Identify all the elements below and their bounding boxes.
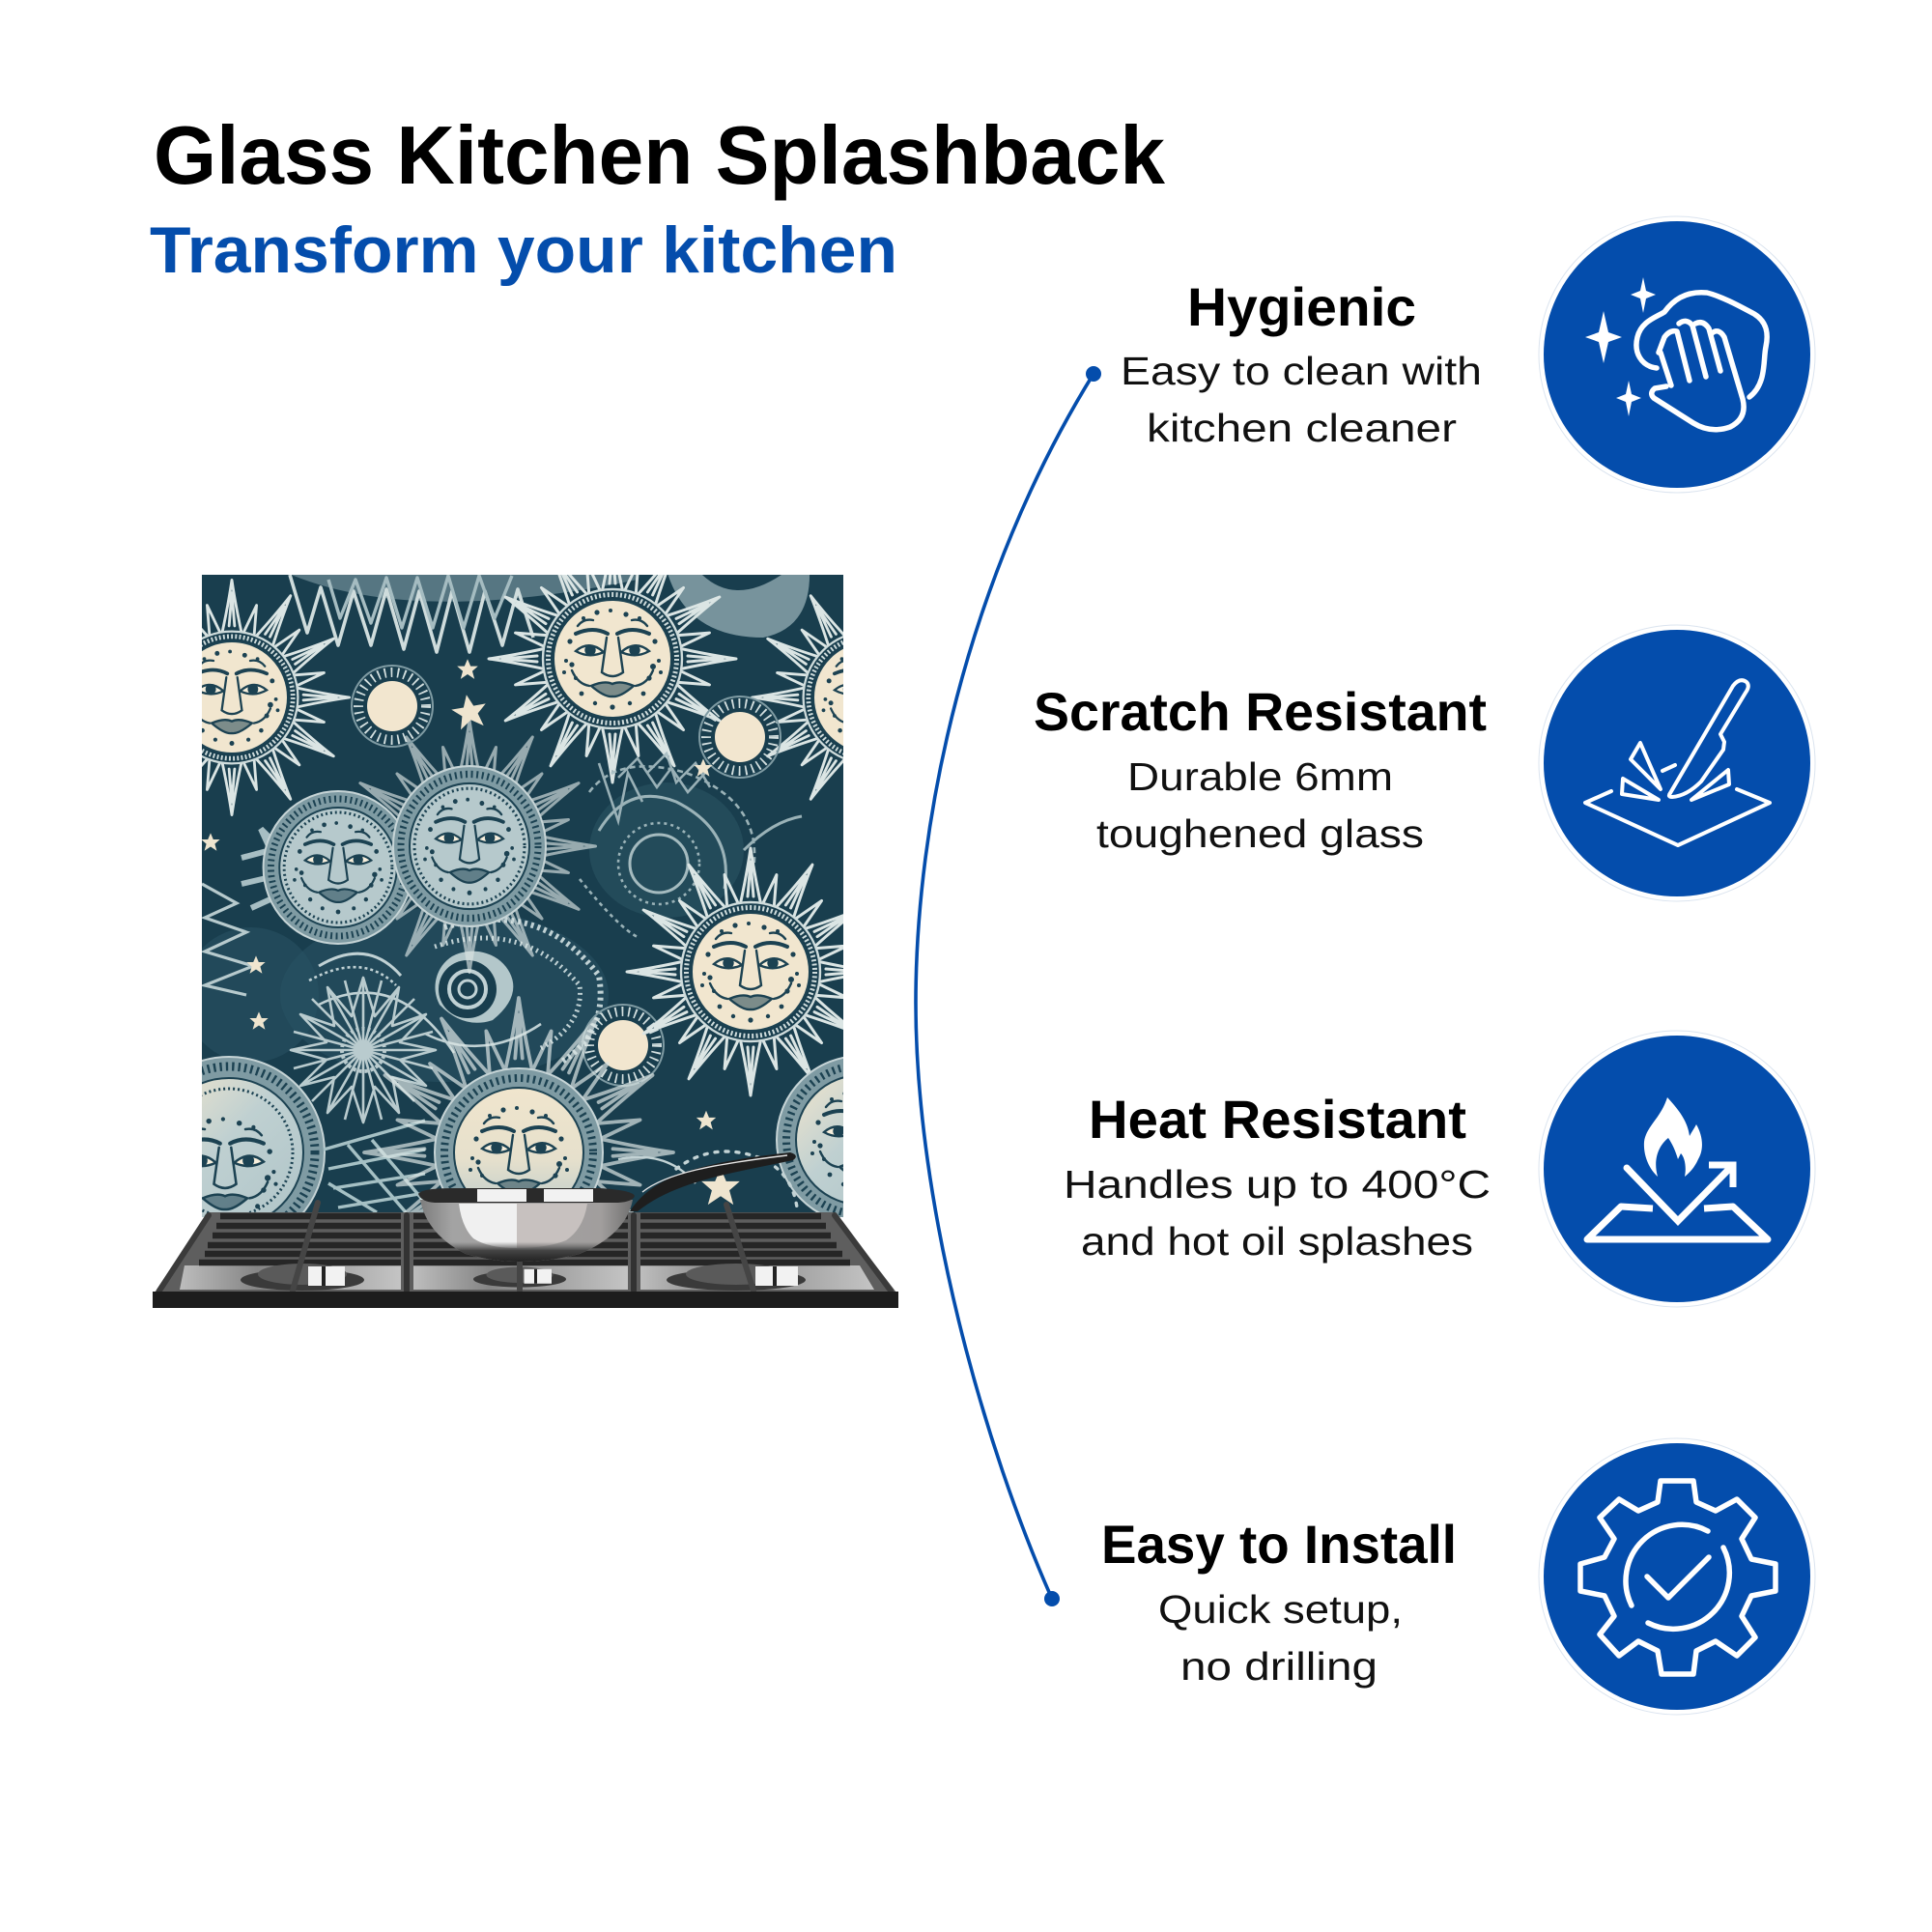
- feature text: Scratch Resistant: Durable 6mm: [1127, 754, 1393, 799]
- dotted arc near right: [676, 1151, 797, 1208]
- eye swirl: [309, 920, 601, 1063]
- moon faces: [242, 720, 596, 973]
- right sun: [626, 846, 843, 1097]
- feature text: Hygienic: Easy to clean with: [1121, 349, 1482, 393]
- hob front edge: [153, 1292, 898, 1308]
- splashback panel: celestial sun and moon pattern: [202, 575, 843, 1217]
- feature text: Heat Resistant: [1064, 1089, 1491, 1264]
- icon: heat resistant flame over glass: [1539, 1031, 1815, 1307]
- feature text: Scratch Resistant: [1034, 681, 1487, 856]
- pan handle: [630, 1152, 796, 1211]
- feature text: Hygienic: Hygienic: [1187, 276, 1416, 337]
- soft tonal patches: [184, 570, 810, 1082]
- stars: [201, 659, 740, 1205]
- feature text: Heat Resistant: and hot oil splashes: [1081, 1219, 1473, 1264]
- feature text: Scratch Resistant: toughened glass: [1096, 811, 1424, 856]
- feature text: Hygienic: [1121, 276, 1482, 450]
- feature text: Scratch Resistant: Scratch Resistant: [1034, 681, 1487, 742]
- feature text: Heat Resistant: Heat Resistant: [1089, 1089, 1466, 1150]
- feature text: Hygienic: kitchen cleaner: [1147, 406, 1457, 450]
- gas hob: [153, 1203, 898, 1308]
- title: Glass Kitchen Splashback: [154, 110, 1166, 202]
- pan body: [420, 1200, 633, 1262]
- feature text: Easy to Install: [1101, 1514, 1457, 1689]
- spiky star burst: [291, 978, 436, 1122]
- small suns: [352, 666, 781, 1086]
- lower suns: [202, 996, 843, 1217]
- steel burner wells: [180, 1265, 874, 1290]
- burners: [241, 1264, 806, 1291]
- feature text: Easy to Install: Quick setup,: [1158, 1587, 1403, 1632]
- grate bars: [199, 1216, 850, 1263]
- connector curve with end dots: [916, 366, 1101, 1606]
- left zigzag rays: [202, 884, 253, 995]
- frying pan: [418, 1152, 796, 1262]
- icon: easy install gear with check: [1539, 1438, 1815, 1715]
- sun faces: [114, 535, 987, 815]
- zigzag top rays: [290, 575, 533, 652]
- grate frame: [159, 1203, 891, 1291]
- feature text: Easy to Install: Easy to Install: [1101, 1514, 1457, 1575]
- hob top plate: [155, 1212, 896, 1293]
- product image: splashback above a gas hob with pan: [153, 575, 898, 1308]
- icon: hygienic hand wiping with sparkles: [1539, 216, 1815, 493]
- feature text: Heat Resistant: Handles up to 400°C: [1064, 1162, 1491, 1207]
- icon: scratch resistant knife on glass: [1539, 625, 1815, 901]
- feature text: Easy to Install: no drilling: [1180, 1644, 1378, 1689]
- swirl line art: [580, 753, 802, 937]
- subtitle: Transform your kitchen: [150, 213, 897, 287]
- pan rim: [418, 1188, 635, 1203]
